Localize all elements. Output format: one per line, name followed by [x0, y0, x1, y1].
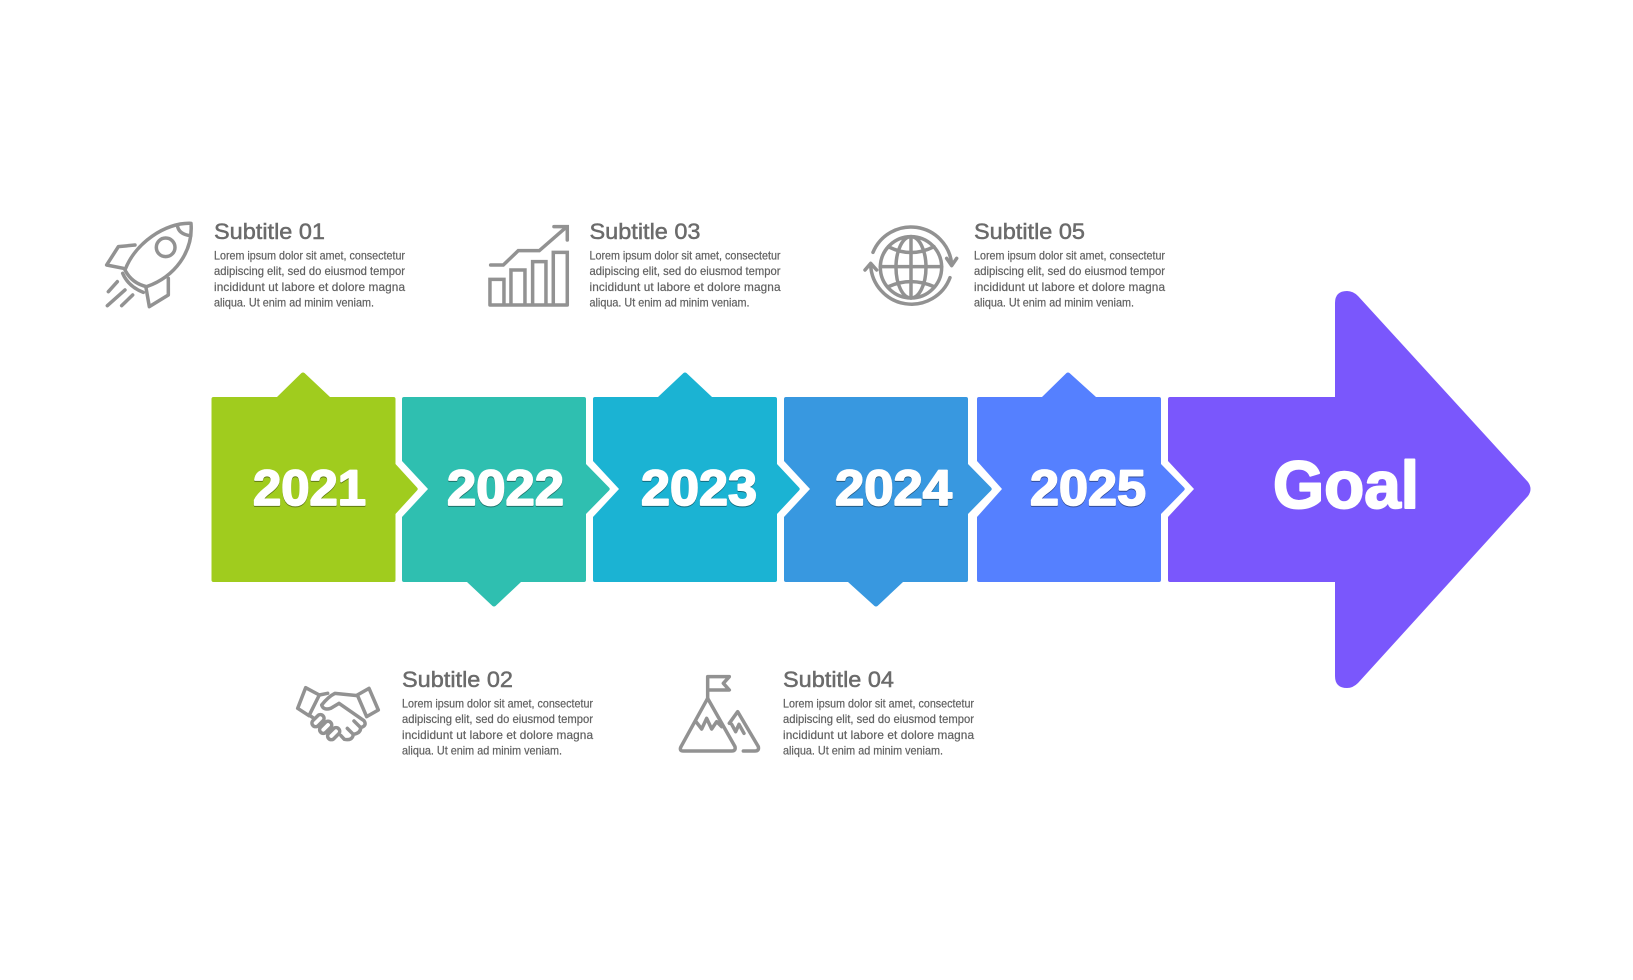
subtitle 03 text: Subtitle 03	[590, 219, 700, 244]
subtitle 04 text: adipiscing elit, sed do eiusmod tempor	[783, 712, 974, 726]
step 2025 block: 2025	[1030, 460, 1146, 516]
subtitle 01 text	[214, 219, 405, 310]
icon: mountain with flag	[680, 677, 759, 751]
subtitle 02 text: Subtitle 02	[402, 667, 513, 692]
subtitle 03 text: Lorem ipsum dolor sit amet, consectetur	[590, 248, 781, 262]
subtitle 04 text: Subtitle 04	[783, 667, 894, 692]
step 2023 block	[593, 372, 800, 582]
step 2022 block: 2022	[447, 460, 564, 516]
subtitle 01 text: adipiscing elit, sed do eiusmod tempor	[214, 264, 405, 278]
step 2023 block: 2023	[641, 460, 757, 516]
step 2024 block: 2024	[835, 460, 952, 516]
goal arrow	[1168, 291, 1530, 688]
subtitle 01 text: aliqua. Ut enim ad minim veniam.	[214, 296, 374, 310]
subtitle 04 text: incididunt ut labore et dolore magna	[783, 728, 974, 742]
step 2025 block	[977, 372, 1185, 582]
subtitle 02 text: Lorem ipsum dolor sit amet, consectetur	[402, 696, 593, 710]
icon: growth chart	[490, 227, 567, 305]
step 2021 block: 2021	[253, 460, 366, 516]
subtitle 03 text: incididunt ut labore et dolore magna	[590, 280, 781, 294]
icon: rocket	[107, 223, 191, 307]
subtitle 03 text: aliqua. Ut enim ad minim veniam.	[590, 296, 750, 310]
subtitle 05 text: incididunt ut labore et dolore magna	[974, 280, 1165, 294]
subtitle 02 text	[402, 667, 593, 758]
subtitle 04 text: Lorem ipsum dolor sit amet, consectetur	[783, 696, 974, 710]
subtitle 05 text: Lorem ipsum dolor sit amet, consectetur	[974, 248, 1165, 262]
subtitle 03 text	[590, 219, 781, 310]
step 2021 block	[212, 372, 418, 582]
subtitle 05 text	[974, 219, 1165, 310]
subtitle 02 text: incididunt ut labore et dolore magna	[402, 728, 593, 742]
icon: globe with arrows	[865, 227, 957, 304]
subtitle 05 text: Subtitle 05	[974, 219, 1085, 244]
subtitle 04 text	[783, 667, 974, 758]
subtitle 01 text: Lorem ipsum dolor sit amet, consectetur	[214, 248, 405, 262]
subtitle 05 text: aliqua. Ut enim ad minim veniam.	[974, 296, 1134, 310]
subtitle 02 text: aliqua. Ut enim ad minim veniam.	[402, 744, 562, 758]
step 2022 block	[402, 397, 610, 606]
subtitle 01 text: incididunt ut labore et dolore magna	[214, 280, 405, 294]
subtitle 04 text: aliqua. Ut enim ad minim veniam.	[783, 744, 943, 758]
subtitle 02 text: adipiscing elit, sed do eiusmod tempor	[402, 712, 593, 726]
subtitle 05 text: adipiscing elit, sed do eiusmod tempor	[974, 264, 1165, 278]
step 2024 block	[784, 397, 992, 606]
icon: handshake	[298, 688, 378, 741]
subtitle 01 text: Subtitle 01	[214, 219, 325, 244]
subtitle 03 text: adipiscing elit, sed do eiusmod tempor	[590, 264, 781, 278]
goal arrow: Goal	[1273, 448, 1419, 523]
